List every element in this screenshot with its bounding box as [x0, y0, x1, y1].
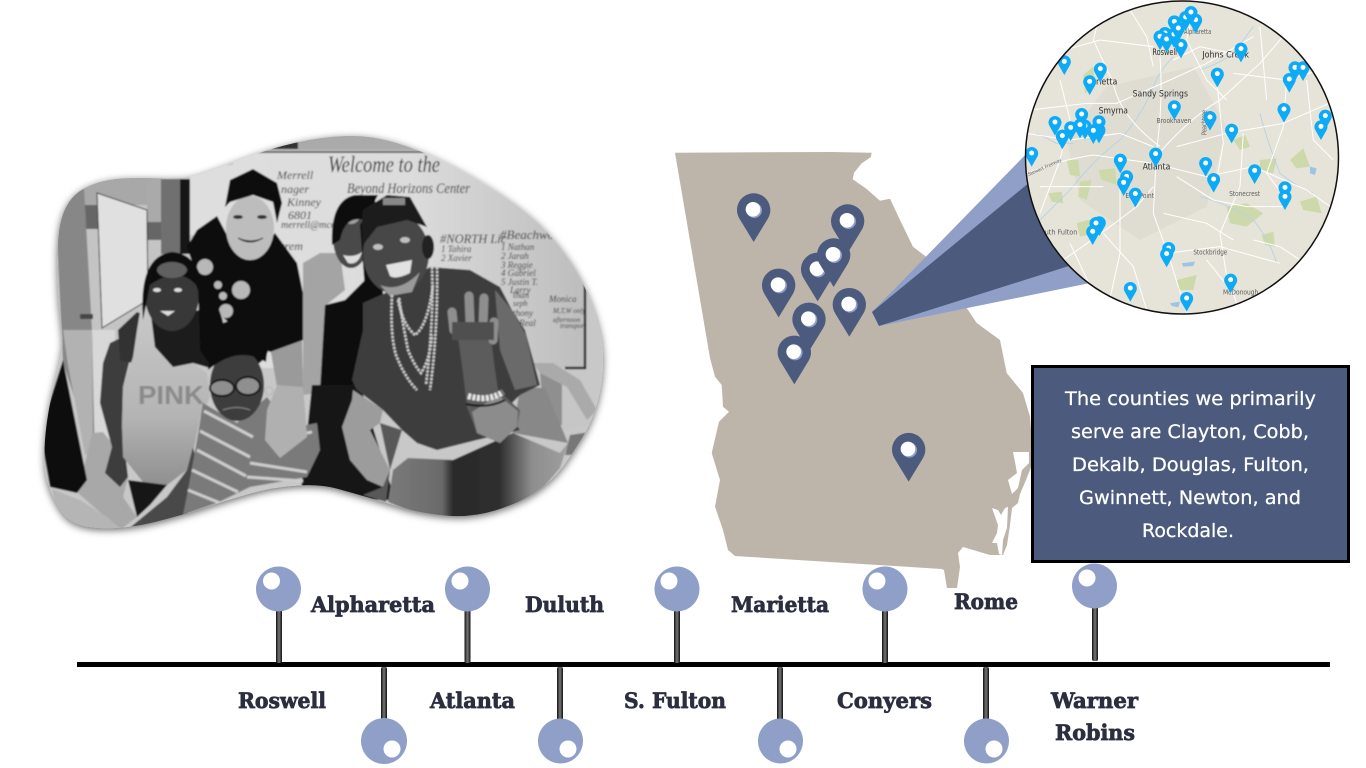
whiteboard writing: #Beachwood Sh	[500, 227, 583, 242]
map: Georgia state outline	[675, 152, 1032, 588]
timeline pin: Alpharetta	[361, 667, 407, 764]
map pins on Georgia	[737, 193, 925, 482]
pin: Marietta	[801, 253, 834, 301]
pin: Rome	[737, 193, 770, 242]
timeline label: S. Fulton: S. Fulton	[624, 688, 726, 713]
callout box: counties served	[1032, 366, 1348, 562]
whiteboard writing: 6801	[288, 208, 312, 222]
whiteboard writing: y Real	[512, 318, 536, 328]
timeline label: Marietta: Marietta	[731, 592, 829, 617]
pin: Warner Robins	[892, 433, 925, 482]
whiteboard writing: 3 Reggie	[500, 260, 533, 270]
small whiteboard	[97, 193, 148, 328]
place labels: Sandy Springs	[1133, 90, 1188, 100]
timeline label: Duluth: Duluth	[525, 592, 604, 617]
timeline label: Conyers: Conyers	[837, 688, 932, 713]
urban shading	[1068, 92, 1216, 193]
location pins	[1025, 6, 1332, 312]
place labels: Smyrna	[1099, 107, 1128, 117]
place labels: Stewart Freeway	[1027, 157, 1063, 178]
timeline label: Warner Robins	[1050, 688, 1139, 745]
place labels: Alpharetta	[1184, 28, 1211, 36]
whiteboard writing: nager	[281, 182, 309, 196]
door	[58, 188, 95, 434]
whiteboard writing: transport	[560, 322, 587, 330]
person: young man in black shirt	[187, 168, 304, 388]
person: seated woman in striped shirt	[127, 320, 320, 530]
timeline pin: Warner Robins	[1072, 564, 1117, 661]
timeline pin: Rome	[964, 667, 1009, 764]
whiteboard writing: 1 Tahira	[441, 244, 472, 254]
callout box: counties served: Rockdale.	[1142, 520, 1234, 542]
timeline label: Roswell: Roswell	[238, 688, 326, 713]
place labels: South Fulton	[1037, 229, 1077, 237]
place labels: rietta	[1096, 78, 1117, 88]
rivers	[1037, 27, 1313, 263]
whiteboard writing: rrem	[280, 239, 303, 253]
whiteboard writing: 2 Jarah	[501, 251, 529, 261]
whiteboard writing: Larry	[509, 285, 531, 295]
timeline label: Warner Robins: Warner	[1050, 688, 1139, 713]
timeline pin: Atlanta	[445, 566, 490, 663]
place labels: Stockbridge	[1193, 248, 1227, 256]
callout box: counties served: Gwinnett, Newton, and	[1079, 487, 1301, 509]
person: man in cap waving	[342, 195, 568, 520]
chair at bottom left	[52, 490, 116, 528]
young man's hand on shoulder	[265, 385, 307, 458]
whiteboard writing: Monica	[548, 294, 577, 304]
timeline label: Alpharetta: Alpharetta	[310, 592, 435, 617]
whiteboard writing: #NORTH Lic	[440, 232, 507, 246]
timeline label: Warner Robins: Robins	[1055, 720, 1135, 745]
pin: Atlanta south	[778, 336, 811, 384]
timeline axis	[77, 662, 1330, 667]
whiteboard writing: Merrell	[276, 168, 314, 182]
callout box: counties served: The counties we primarily	[1064, 388, 1316, 410]
timeline pin: Marietta	[758, 667, 803, 764]
timeline pin: Roswell	[256, 566, 301, 663]
whiteboard writing: Welcome to the	[328, 152, 440, 177]
place labels: Stonecrest	[1229, 190, 1260, 198]
person: back woman	[300, 195, 395, 500]
left wall with bands	[150, 260, 158, 270]
whiteboard writing: than	[513, 290, 530, 300]
timeline pin: Duluth	[538, 667, 583, 764]
timeline label: Rome: Rome	[954, 589, 1018, 614]
whiteboard writing: Kinney	[286, 195, 322, 209]
pin: Alpharetta	[831, 204, 864, 253]
pin: Roswell area	[817, 238, 850, 287]
whiteboard writing: merrell@mcommunity	[281, 220, 371, 231]
dark coat at left edge	[42, 360, 87, 493]
zoomed metro Atlanta map	[1025, 1, 1340, 314]
whiteboard writing: 1 Nathan	[501, 242, 535, 252]
place labels: Roswell	[1152, 48, 1177, 58]
place labels: East Point	[1125, 192, 1154, 200]
place labels: Johns Creek	[1201, 51, 1249, 61]
place labels: Brookhaven	[1157, 117, 1191, 125]
whiteboard writing	[276, 152, 587, 330]
callout box: counties served: Dekalb, Douglas, Fulton,	[1072, 454, 1309, 476]
person: woman in tank top	[100, 252, 225, 517]
person: woman in tank top: PINK	[138, 380, 204, 410]
timeline pin: S. Fulton	[654, 566, 700, 663]
pin: Conyers	[833, 288, 866, 337]
whiteboard writing: 2 Xavier	[441, 253, 472, 263]
place labels: Peachtree	[1201, 110, 1209, 135]
callout box: counties served: serve are Clayton, Cobb,	[1071, 421, 1309, 443]
whiteboard writing: afternoon	[553, 316, 581, 324]
whiteboard writing: thony	[513, 308, 533, 318]
callout beam from Georgia to zoomed map	[872, 150, 1095, 326]
place labels: McDonough	[1223, 288, 1258, 296]
roads	[1027, 10, 1340, 313]
whiteboard writing: 5 Justin T.	[501, 277, 538, 287]
place labels: Atlanta	[1143, 163, 1170, 173]
pin: Atlanta	[792, 303, 826, 351]
whiteboard	[233, 152, 585, 368]
whiteboard writing: Beyond Horizons Center	[347, 181, 470, 197]
timeline pin: Conyers	[862, 566, 908, 663]
timeline label: Atlanta: Atlanta	[429, 688, 515, 713]
photo: group of people at the center, in blob frame	[40, 130, 610, 530]
parks	[1048, 67, 1322, 290]
photo background wall	[40, 130, 610, 530]
raised hand and forearm	[458, 340, 520, 429]
lakes	[1170, 167, 1317, 307]
shirt graphics	[197, 259, 250, 318]
necklaces	[392, 267, 437, 390]
dark pillar	[161, 179, 180, 254]
whiteboard writing: 4 Gabriel	[501, 268, 536, 278]
pin: S. Fulton	[762, 269, 795, 317]
plastic chair	[533, 363, 597, 455]
whiteboard writing: seph	[513, 299, 528, 308]
place labels	[1027, 28, 1260, 296]
whiteboard writing: M,T,W only	[552, 307, 586, 315]
floor tiles	[78, 432, 137, 530]
